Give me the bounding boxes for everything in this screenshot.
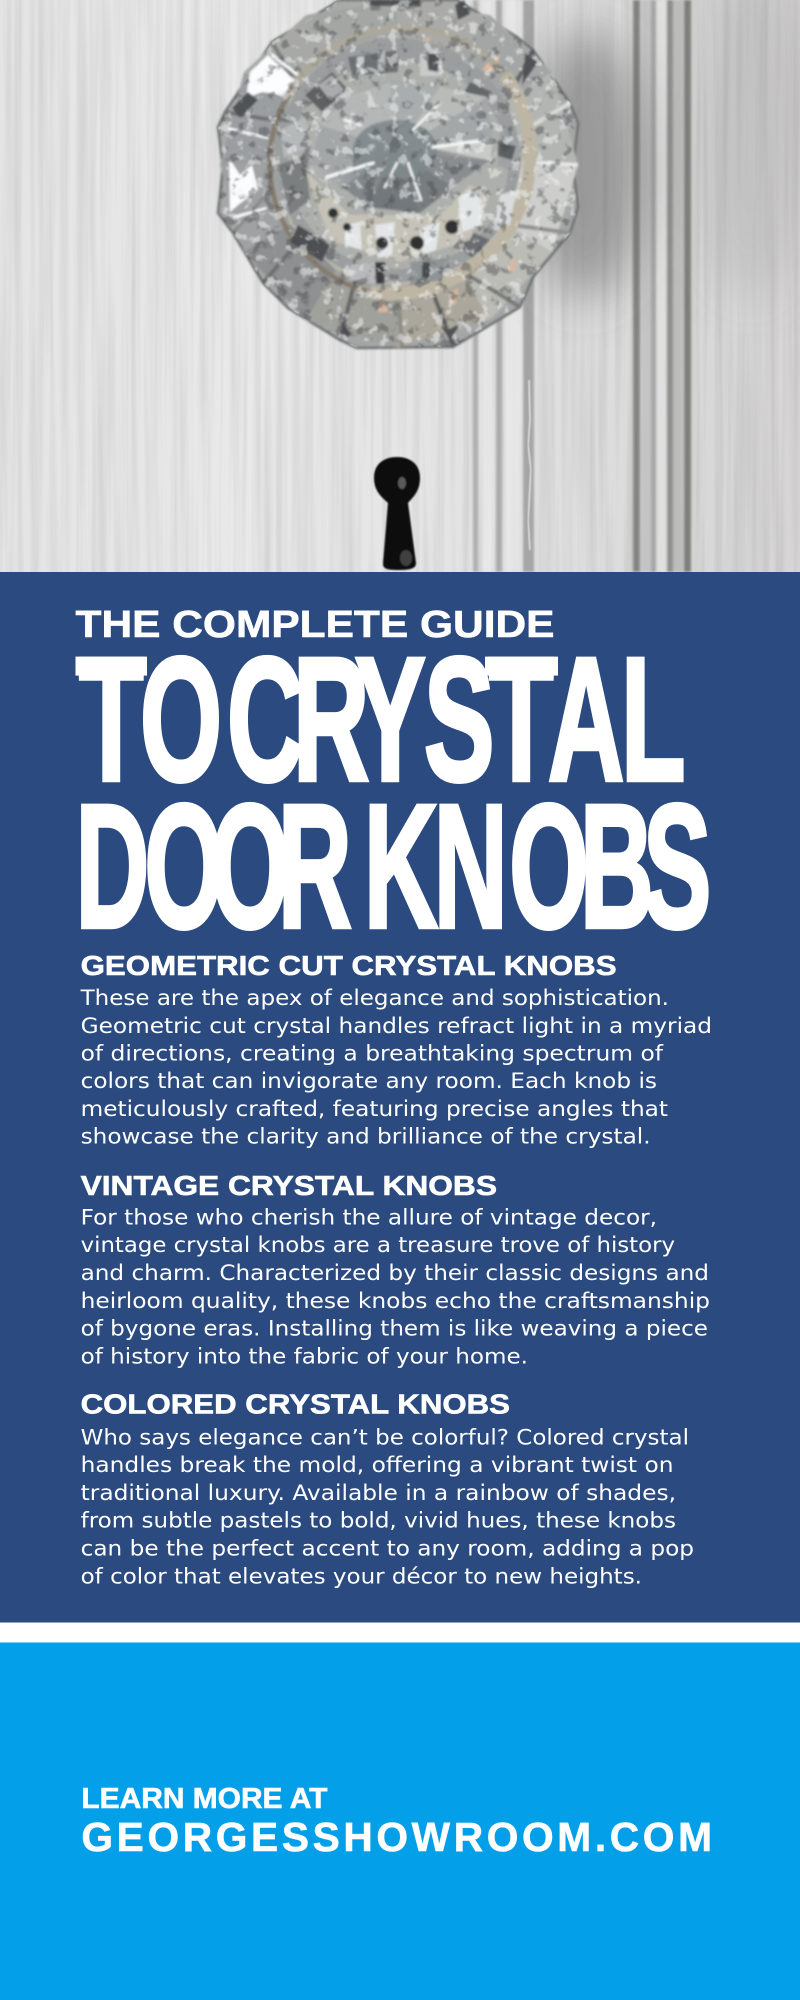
panel: blue call to action xyxy=(0,1642,800,2000)
body text: For those who cherish the allure of vintage decor, xyxy=(81,1205,657,1230)
body text: of history into the fabric of your home. xyxy=(81,1344,528,1369)
body text: Who says elegance can’t be colorful? Colored crystal xyxy=(81,1426,689,1450)
photo: crystal door knob on white door xyxy=(0,0,800,572)
section: colored crystal knobs xyxy=(81,1388,694,1590)
center dome xyxy=(330,150,464,186)
learn more label: LEARN MORE AT xyxy=(81,1783,328,1815)
body text: of bygone eras. Installing them is like weaving a piece xyxy=(81,1316,708,1342)
knob outline xyxy=(218,0,578,348)
body text: traditional luxury. Available in a rainbow of shades, xyxy=(81,1481,676,1506)
tan inner ring xyxy=(370,75,530,294)
body text xyxy=(80,986,712,1150)
website address: GEORGESSHOWROOM.COM xyxy=(81,1814,712,1860)
body text: can be the perfect accent to any room, adding a pop xyxy=(81,1536,694,1562)
main title line 2: DOOR KNOBS xyxy=(76,769,711,965)
heading: VINTAGE CRYSTAL KNOBS xyxy=(81,1170,497,1201)
body text: from subtle pastels to bold, vivid hues, these knobs xyxy=(81,1508,676,1534)
inner band xyxy=(276,38,520,282)
body text xyxy=(81,1205,710,1369)
heading: COLORED CRYSTAL KNOBS xyxy=(81,1388,510,1420)
body text: These are the apex of elegance and sophistication. xyxy=(80,986,669,1011)
body text: meticulously crafted, featuring precise angles that xyxy=(81,1097,668,1122)
main title line 1: TO CRYSTAL xyxy=(79,621,686,818)
heading: GEOMETRIC CUT CRYSTAL KNOBS xyxy=(81,950,617,981)
dark cut dots xyxy=(328,208,459,250)
dome rays xyxy=(327,103,487,200)
panel: navy content xyxy=(0,572,800,1622)
body text: Geometric cut crystal handles refract light in a myriad xyxy=(81,1014,712,1039)
inner ring blocks xyxy=(278,50,520,286)
section: geometric cut crystal knobs xyxy=(80,950,712,1150)
tan area below dome xyxy=(305,170,490,262)
body text xyxy=(81,1426,694,1590)
T crossbar extensions xyxy=(76,657,558,676)
peach reflections xyxy=(378,36,516,312)
knob cast shadow xyxy=(527,0,800,300)
icon: crystal knob xyxy=(210,0,590,355)
body text: vintage crystal knobs are a treasure trove of history xyxy=(81,1233,675,1258)
body text: of directions, creating a breathtaking spectrum of xyxy=(81,1042,664,1066)
body text: handles break the mold, offering a vibrant twist on xyxy=(81,1453,674,1478)
white glints on left of knob xyxy=(228,54,299,219)
subtitle: the complete guide: THE COMPLETE GUIDE xyxy=(76,604,554,646)
door moldings xyxy=(473,0,691,572)
hairline crack in paint xyxy=(528,380,531,550)
door background xyxy=(0,0,800,572)
facet ridges xyxy=(225,42,578,347)
icon: black keyhole xyxy=(374,457,420,570)
body text: showcase the clarity and brilliance of the crystal. xyxy=(81,1125,651,1150)
section: vintage crystal knobs xyxy=(81,1170,710,1369)
body text: and charm. Characterized by their classic designs and xyxy=(81,1261,709,1286)
crystal sparkle texture xyxy=(210,0,590,355)
outer facets xyxy=(220,0,578,348)
dome facets xyxy=(310,82,493,213)
silver cuts below dome xyxy=(345,190,482,258)
body text: of color that elevates your décor to new heights. xyxy=(81,1564,642,1590)
dark accents on outer band xyxy=(232,0,538,340)
body text: heirloom quality, these knobs echo the craftsmanship xyxy=(81,1289,710,1314)
body text: colors that can invigorate any room. Each knob is xyxy=(81,1069,657,1094)
title xyxy=(76,604,711,965)
